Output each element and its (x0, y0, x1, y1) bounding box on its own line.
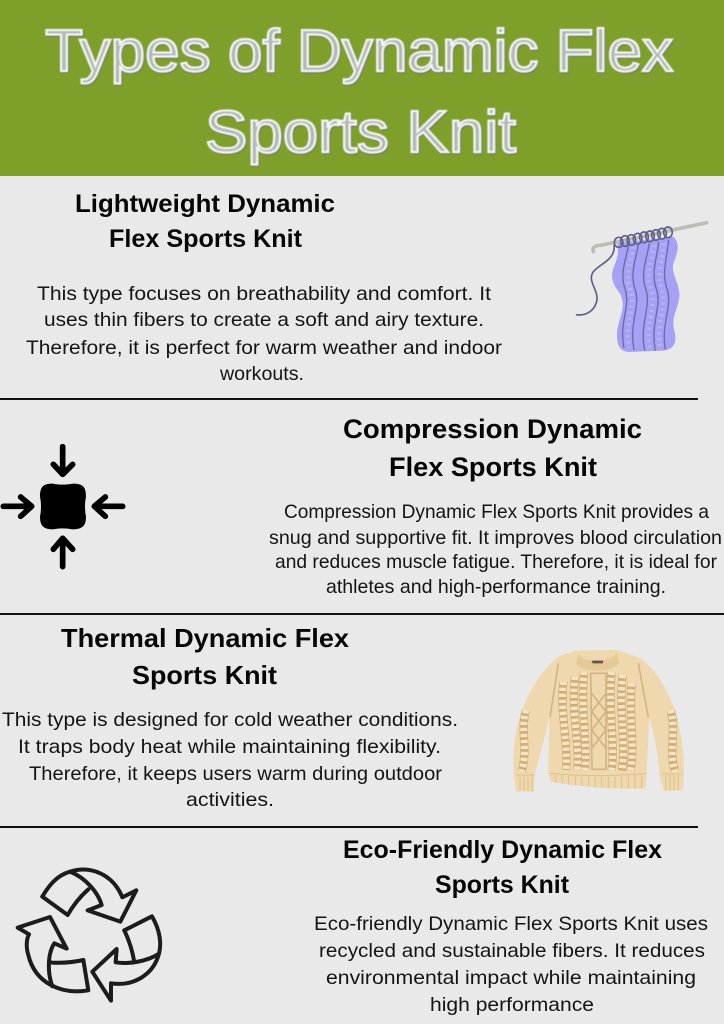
text block: thermal description (2, 709, 458, 811)
heading: compression: Compression Dynamic (343, 414, 642, 444)
text block: lightweight description (26, 283, 503, 385)
panel: lightweight (26, 190, 707, 385)
text block: compression description: Compression Dynamic Flex Sports Knit provides a (284, 501, 709, 523)
panel: eco-friendly (18, 836, 708, 1016)
heading: eco-friendly (343, 836, 662, 899)
heading: lightweight: Lightweight Dynamic (75, 190, 335, 218)
panel: compression (3, 414, 722, 598)
divider (0, 826, 698, 828)
title (45, 18, 674, 166)
heading: lightweight (75, 190, 335, 253)
heading: thermal: Sports Knit (132, 660, 277, 690)
title: Types of Dynamic Flex (46, 20, 674, 86)
text block: eco-friendly description: recycled and sustainable fibers. It reduces (319, 940, 705, 962)
heading: compression: Flex Sports Knit (389, 452, 597, 482)
text block: lightweight description: uses thin fibers to create a soft and airy texture. (44, 309, 484, 331)
heading: eco-friendly: Sports Knit (435, 871, 570, 899)
icon: compression arrows (3, 447, 123, 567)
heading: compression (343, 414, 642, 482)
icon: recycling arrows (18, 870, 160, 1001)
panel: thermal (2, 623, 684, 811)
divider (0, 398, 698, 400)
heading: lightweight: Flex Sports Knit (109, 225, 303, 253)
heading: thermal (61, 623, 350, 690)
text block: eco-friendly description: Eco-friendly Dynamic Flex Sports Knit uses (314, 913, 708, 935)
text block: compression description: snug and supportive fit. It improves blood circulation (269, 527, 722, 549)
text block: thermal description: activities. (186, 789, 274, 811)
title: Sports Knit (205, 99, 516, 165)
title: Types of Dynamic Flex (45, 18, 673, 84)
text block: thermal description: This type is designed for cold weather conditions. (2, 709, 458, 731)
divider (0, 613, 724, 615)
text block: lightweight description: workouts. (219, 363, 304, 385)
title: Sports Knit (206, 100, 517, 166)
header banner (0, 0, 724, 178)
icon: cable knit sweater (513, 650, 684, 792)
text block: thermal description: It traps body heat while maintaining flexibility. (18, 736, 441, 758)
text block: compression description: athletes and high-performance training. (326, 576, 666, 598)
text block: eco-friendly description: environmental impact while maintaining (326, 967, 696, 989)
icon: knitting swatch on needle (576, 223, 707, 352)
text block: compression description: and reduces muscle fatigue. Therefore, it is ideal for (275, 551, 717, 573)
text block: compression description (269, 501, 722, 598)
heading: thermal: Thermal Dynamic Flex (61, 623, 350, 653)
heading: eco-friendly: Eco-Friendly Dynamic Flex (343, 836, 662, 864)
text block: eco-friendly description (314, 913, 708, 1016)
text block: lightweight description: This type focuses on breathability and comfort. It (37, 283, 492, 305)
text block: eco-friendly description: high performance (430, 994, 594, 1016)
text block: lightweight description: Therefore, it is perfect for warm weather and indoor (26, 337, 503, 359)
text block: thermal description: Therefore, it keeps users warm during outdoor (29, 763, 443, 785)
